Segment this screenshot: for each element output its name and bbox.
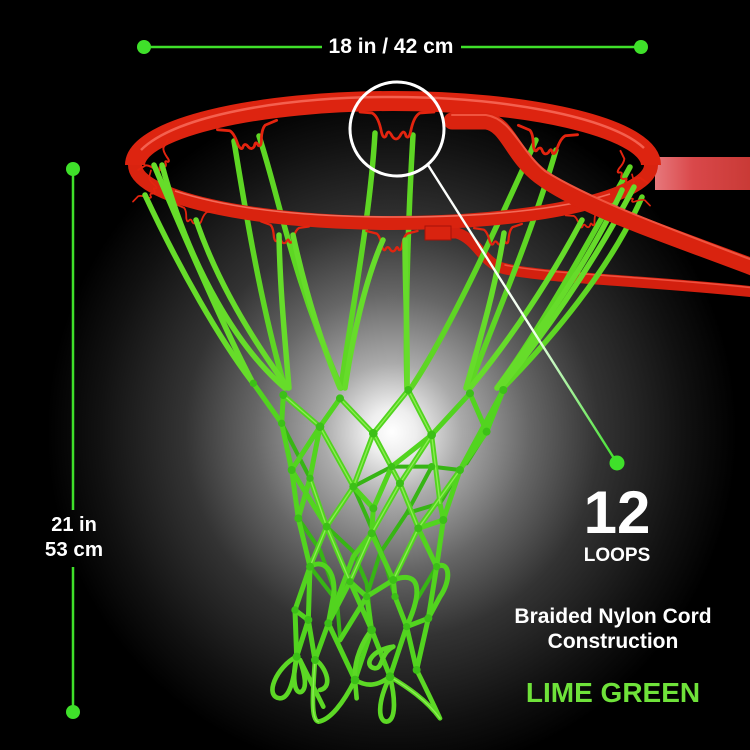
colour name: LIME GREEN bbox=[526, 677, 700, 708]
width dimension bbox=[137, 35, 648, 58]
width dimension: 18 in / 42 cm bbox=[329, 35, 453, 58]
height dimension: 53 cm bbox=[45, 538, 103, 561]
loop count: LOOPS bbox=[584, 545, 650, 566]
pointer end dot bbox=[610, 456, 624, 470]
callout circle around loop bbox=[350, 82, 444, 176]
bottom loops bbox=[272, 630, 440, 722]
net mesh bbox=[250, 380, 507, 722]
lower support tube bbox=[432, 233, 750, 292]
construction text bbox=[514, 605, 712, 653]
pointer line to loops bbox=[428, 165, 617, 463]
rim: back arc bbox=[135, 97, 651, 165]
back layer mesh cords bbox=[282, 423, 487, 637]
net hooks bbox=[133, 112, 650, 251]
construction text: Braided Nylon Cord bbox=[514, 605, 712, 628]
height dimension: 21 in bbox=[51, 514, 97, 536]
backboard bracket plate bbox=[655, 157, 750, 190]
mesh knots bbox=[250, 380, 507, 684]
height dimension bbox=[45, 162, 103, 719]
front net cords bbox=[145, 165, 634, 388]
mesh highlights bbox=[283, 390, 460, 722]
mesh cords bbox=[253, 383, 503, 680]
loop count: 12 bbox=[584, 479, 650, 546]
back net cords bbox=[234, 133, 642, 388]
upper bracket tube bbox=[452, 115, 750, 268]
construction text: Construction bbox=[548, 630, 678, 653]
rim: front arc bbox=[135, 165, 651, 223]
rim clamp bbox=[425, 226, 451, 240]
